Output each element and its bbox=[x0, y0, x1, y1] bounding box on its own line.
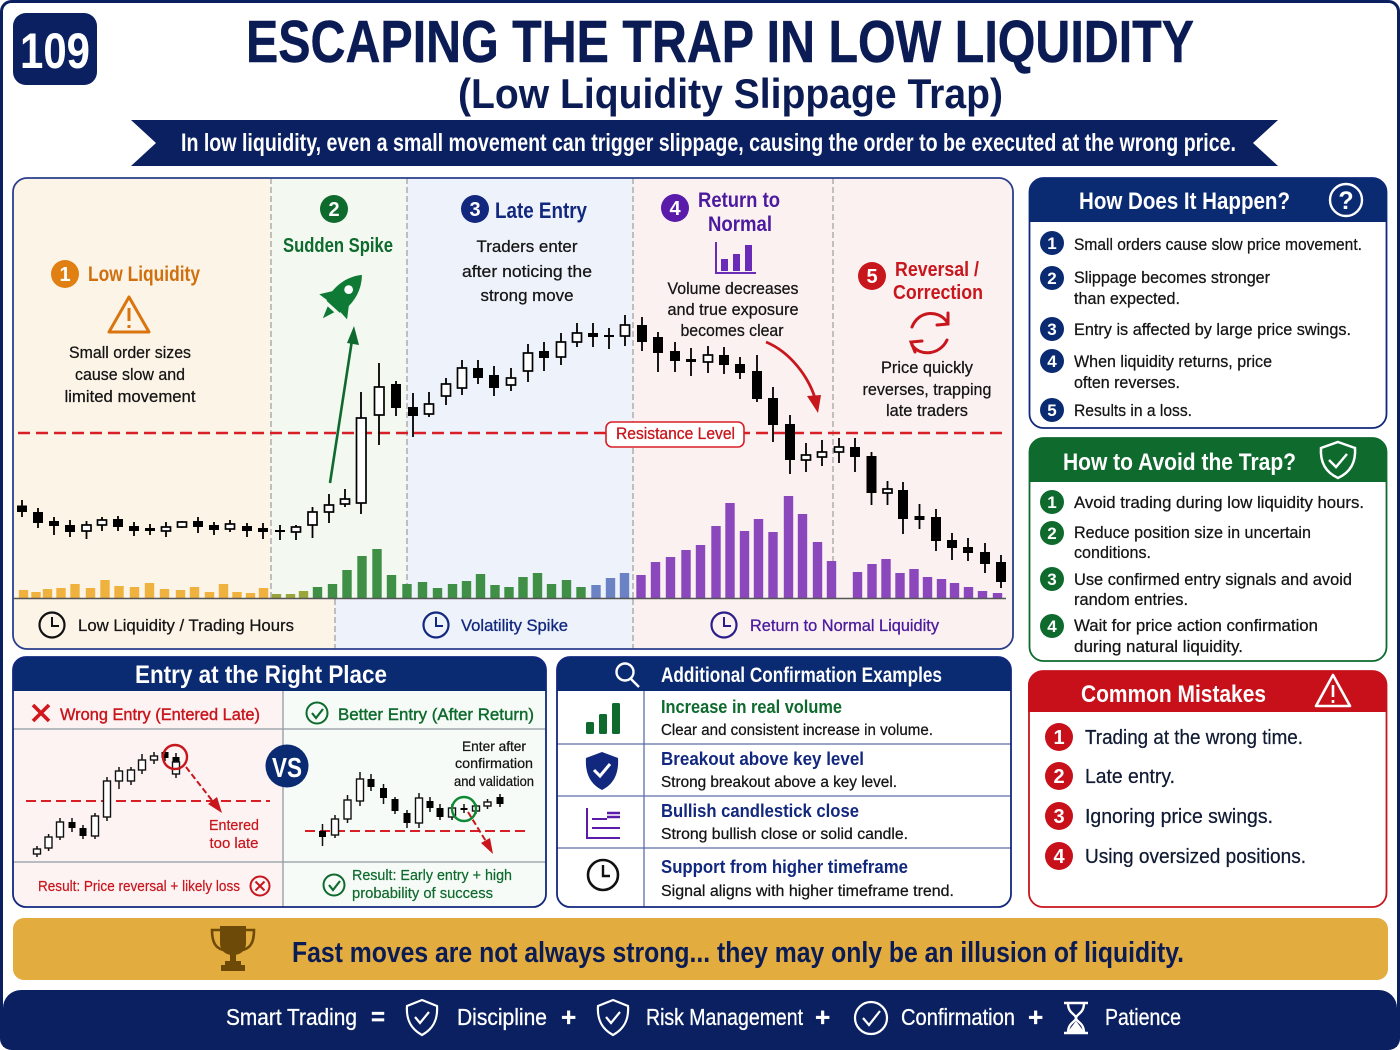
banner: takeaway: Fast moves are not always strong... they may only be an illusion of liquidity. bbox=[292, 937, 1184, 969]
panel: price chart phases bbox=[13, 178, 1013, 649]
list: mistakes: Late entry. bbox=[1085, 766, 1175, 788]
list: avoidance steps: random entries. bbox=[1074, 591, 1188, 609]
mini chart: better entry: Enter after bbox=[462, 738, 526, 754]
phase 5: reversal: reverses, trapping bbox=[862, 381, 992, 399]
list: avoidance steps: during natural liquidity. bbox=[1074, 638, 1243, 656]
timeline label: volatility spike: Volatility Spike bbox=[461, 617, 568, 635]
footer: formula bbox=[3, 990, 1397, 1047]
arrow: curved reversal bbox=[766, 342, 821, 413]
wrong entry heading: Wrong Entry (Entered Late) bbox=[60, 706, 260, 724]
mini chart: better entry: and validation bbox=[454, 773, 534, 789]
list: avoidance steps: 1 bbox=[1047, 493, 1057, 512]
list: avoidance steps: Use confirmed entry signals and avoid bbox=[1074, 571, 1352, 589]
timeline label: return to normal bbox=[712, 612, 940, 638]
panel: how to avoid the trap bbox=[1029, 438, 1387, 661]
mini chart: wrong entry: too late bbox=[210, 836, 258, 852]
icon: hourglass bbox=[1064, 1003, 1088, 1033]
arrow: falling after late entry bbox=[186, 767, 222, 813]
list: causes: Small orders cause slow price movement. bbox=[1074, 236, 1362, 254]
icon: rocket bbox=[309, 262, 376, 331]
footer: formula: Discipline bbox=[457, 1004, 547, 1030]
icon: shield check bbox=[1321, 442, 1355, 478]
list: avoidance steps: 2 bbox=[1047, 524, 1057, 543]
list: mistakes: Using oversized positions. bbox=[1085, 846, 1306, 868]
list: causes: Results in a loss. bbox=[1074, 402, 1192, 420]
phase 2: sudden spike: 2 bbox=[328, 199, 340, 221]
banner: takeaway bbox=[13, 918, 1388, 980]
icon: reversal arrows bbox=[911, 313, 948, 353]
footer: formula: Confirmation bbox=[901, 1004, 1015, 1030]
phase 4: return to normal: and true exposure bbox=[668, 301, 798, 319]
icon: question mark bbox=[1330, 184, 1362, 216]
footer: formula: + bbox=[815, 1002, 830, 1032]
mini chart: wrong entry: Entered bbox=[209, 818, 259, 834]
list: avoidance steps: Reduce position size in uncertain bbox=[1074, 524, 1311, 542]
mini chart: wrong entry bbox=[26, 745, 270, 857]
icon: filled shield bbox=[586, 752, 618, 790]
icon: trophy bbox=[212, 926, 254, 971]
list: causes: Entry is affected by large price swings. bbox=[1074, 321, 1351, 339]
panel: common mistakes bbox=[1028, 671, 1387, 907]
footer: formula: + bbox=[1028, 1002, 1043, 1032]
phase 1: low liquidity: Low Liquidity bbox=[88, 263, 200, 286]
icon: candle chart bbox=[587, 808, 620, 838]
phase 4: return to normal bbox=[661, 189, 798, 340]
icon: warning triangle bbox=[1316, 675, 1350, 706]
phase 5: reversal: late traders bbox=[886, 402, 968, 420]
phase 4: return to normal: Return to bbox=[698, 189, 780, 212]
list: mistakes: 3 bbox=[1053, 806, 1065, 828]
phase 3: late entry: strong move bbox=[480, 287, 574, 305]
panel: how does it happen: How Does It Happen? bbox=[1079, 188, 1290, 215]
icon: discipline shield bbox=[407, 1000, 437, 1035]
phase 2: sudden spike bbox=[283, 195, 393, 483]
list: avoidance steps: conditions. bbox=[1074, 544, 1151, 562]
row: higher timeframe: Support from higher timeframe bbox=[661, 857, 908, 877]
phase 3: late entry: 3 bbox=[469, 199, 481, 221]
icon: risk shield bbox=[598, 1000, 628, 1035]
timeline label: volatility spike bbox=[424, 612, 568, 638]
phase 1: low liquidity: Small order sizes bbox=[69, 344, 191, 362]
list: avoidance steps: Avoid trading during low liquidity hours. bbox=[1074, 494, 1364, 512]
list: mistakes: Trading at the wrong time. bbox=[1085, 727, 1303, 749]
badge: VS: VS bbox=[272, 752, 302, 783]
phase 4: return to normal: Normal bbox=[708, 213, 772, 236]
mini chart: better entry bbox=[305, 738, 534, 854]
panel: additional confirmation examples: Additional Confirmation Examples bbox=[661, 664, 942, 687]
resistance label bbox=[606, 422, 744, 447]
phase 4: return to normal: Volume decreases bbox=[668, 280, 798, 298]
icon: warning triangle bbox=[109, 297, 149, 332]
row: higher timeframe bbox=[588, 857, 954, 900]
title: ESCAPING THE TRAP IN LOW LIQUIDITY bbox=[246, 9, 1194, 75]
list: causes: often reverses. bbox=[1074, 374, 1180, 392]
volume bars bbox=[14, 496, 1006, 598]
panel: how does it happen bbox=[1029, 178, 1387, 428]
panel: additional confirmation examples bbox=[557, 657, 1011, 907]
panel: how to avoid the trap: How to Avoid the Trap? bbox=[1063, 449, 1296, 476]
row: bullish close: Strong bullish close or solid candle. bbox=[661, 826, 908, 843]
phase 3: late entry bbox=[461, 195, 592, 305]
phase 4: return to normal: becomes clear bbox=[680, 322, 784, 340]
list: causes: 3 bbox=[1047, 320, 1057, 339]
phase 1: low liquidity: cause slow and bbox=[75, 366, 185, 384]
phase 1: low liquidity: limited movement bbox=[64, 388, 196, 406]
phase 3: late entry: Traders enter bbox=[476, 238, 578, 256]
list: mistakes: 4 bbox=[1053, 846, 1065, 868]
row: breakout: Breakout above key level bbox=[661, 749, 864, 769]
timeline label: return to normal: Return to Normal Liquidity bbox=[750, 617, 940, 635]
phase 3: late entry: Late Entry bbox=[495, 198, 588, 223]
row: real volume bbox=[586, 697, 933, 739]
list: mistakes bbox=[1045, 723, 1306, 870]
mini chart: better entry: confirmation bbox=[455, 755, 533, 771]
row: higher timeframe: Signal aligns with higher timeframe trend. bbox=[661, 883, 954, 900]
row: real volume: Increase in real volume bbox=[661, 697, 842, 717]
timeline label: low liquidity bbox=[40, 612, 294, 638]
row: real volume: Clear and consistent increase in volume. bbox=[661, 722, 933, 739]
badge: 109: 109 bbox=[20, 23, 90, 79]
phase 3: late entry: after noticing the bbox=[462, 263, 592, 281]
row: breakout: Strong breakout above a key level. bbox=[661, 774, 897, 791]
phase 1: low liquidity: 1 bbox=[59, 264, 71, 286]
arrow: early entry bbox=[468, 812, 493, 854]
list: causes: 4 bbox=[1047, 352, 1057, 371]
list: avoidance steps bbox=[1040, 490, 1364, 656]
phase 2: sudden spike: Sudden Spike bbox=[283, 235, 393, 257]
ribbon: key message bbox=[131, 120, 1278, 166]
list: mistakes: 2 bbox=[1053, 766, 1065, 788]
icon: clock bbox=[588, 860, 618, 890]
footer: formula: = bbox=[371, 1004, 385, 1031]
icon: question mark: ? bbox=[1338, 187, 1354, 215]
list: avoidance steps: Wait for price action confirmation bbox=[1074, 617, 1318, 635]
subtitle: (Low Liquidity Slippage Trap) bbox=[458, 70, 1003, 117]
list: causes: 1 bbox=[1047, 234, 1057, 253]
list: causes bbox=[1040, 231, 1362, 422]
footer: formula: + bbox=[561, 1002, 576, 1032]
badge: VS bbox=[266, 744, 308, 788]
footer: formula: Patience bbox=[1105, 1004, 1181, 1030]
result: better entry: probability of success bbox=[352, 886, 493, 902]
row: breakout bbox=[586, 749, 897, 791]
badge: 109 bbox=[13, 13, 97, 85]
footer: formula: Risk Management bbox=[646, 1004, 804, 1030]
phase 5: reversal bbox=[858, 259, 992, 420]
list: causes: than expected. bbox=[1074, 290, 1180, 308]
panel: common mistakes: Common Mistakes bbox=[1081, 681, 1266, 708]
icon: volume bars bbox=[716, 242, 756, 273]
row: bullish close bbox=[587, 801, 908, 843]
list: avoidance steps: 3 bbox=[1047, 570, 1057, 589]
list: causes: Slippage becomes stronger bbox=[1074, 269, 1270, 287]
phase 5: reversal: Correction bbox=[893, 282, 983, 304]
row: bullish close: Bullish candlestick close bbox=[661, 801, 859, 821]
list: causes: 2 bbox=[1047, 269, 1057, 288]
list: mistakes: Ignoring price swings. bbox=[1085, 806, 1273, 828]
list: mistakes: 1 bbox=[1053, 727, 1065, 749]
phase 5: reversal: Price quickly bbox=[881, 359, 974, 377]
result: better entry bbox=[324, 868, 512, 902]
phase 5: reversal: Reversal / bbox=[895, 259, 979, 281]
icon: magnifier bbox=[616, 664, 639, 687]
footer: formula: Smart Trading bbox=[226, 1004, 357, 1030]
timeline label: low liquidity: Low Liquidity / Trading Hours bbox=[78, 617, 294, 635]
list: causes: 5 bbox=[1047, 401, 1057, 420]
resistance line bbox=[18, 432, 1005, 434]
better entry heading: Better Entry (After Return) bbox=[338, 706, 534, 724]
icon: green bars bbox=[586, 703, 620, 734]
list: causes: When liquidity returns, price bbox=[1074, 353, 1272, 371]
phase 4: return to normal: 4 bbox=[669, 198, 681, 220]
candlesticks bbox=[22, 315, 1001, 588]
result: better entry: Result: Early entry + high bbox=[352, 868, 512, 884]
phase 1: low liquidity bbox=[51, 260, 200, 406]
panel: entry at the right place: Entry at the Right Place bbox=[135, 661, 387, 689]
icon: confirmation check bbox=[855, 1002, 887, 1034]
phase 5: reversal: 5 bbox=[866, 266, 878, 288]
result: wrong entry: Result: Price reversal + likely loss bbox=[38, 879, 240, 895]
resistance label: Resistance Level bbox=[616, 424, 735, 443]
list: avoidance steps: 4 bbox=[1047, 617, 1057, 636]
panel: entry at the right place bbox=[13, 657, 546, 907]
arrow: upward spike bbox=[330, 326, 359, 483]
